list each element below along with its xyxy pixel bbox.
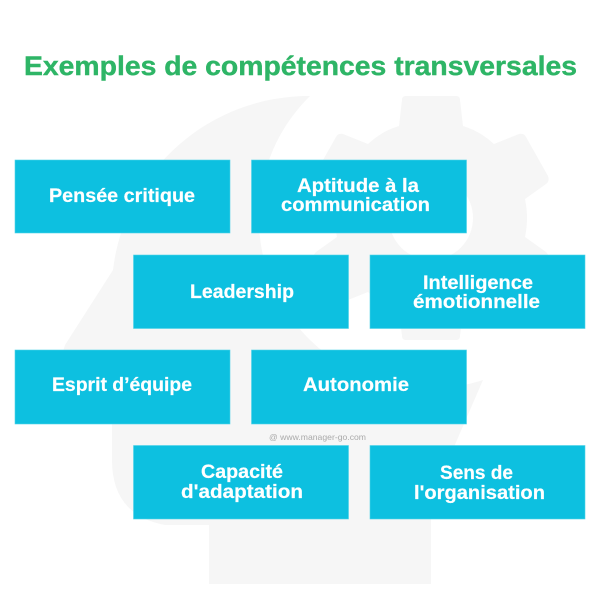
watermark: @ www.manager-go.com xyxy=(269,432,366,442)
card: Sens de l'organisation xyxy=(370,446,585,519)
card: Leadership: Leadership xyxy=(190,281,294,303)
card: Intelligence émotionnelle: Intelligence xyxy=(423,272,533,294)
card: Aptitude à la communication xyxy=(252,160,466,233)
card: Capacité d'adaptation xyxy=(134,446,348,519)
card: Intelligence émotionnelle: émotionnelle xyxy=(413,291,540,313)
head silhouette xyxy=(63,96,483,584)
card: Aptitude à la communication: Aptitude à la xyxy=(297,175,419,197)
card: Intelligence émotionnelle xyxy=(370,255,585,328)
background icon: head silhouette with gear xyxy=(63,96,549,584)
gear xyxy=(313,96,549,340)
card: Esprit d'équipe: Esprit d’équipe xyxy=(52,374,192,396)
card: Capacité d'adaptation: d'adaptation xyxy=(181,481,303,503)
card: Pensée critique: Pensée critique xyxy=(49,185,195,207)
card: Aptitude à la communication: communication xyxy=(281,194,430,216)
card: Autonomie xyxy=(252,350,466,424)
title: Exemples de compétences transversales xyxy=(24,51,577,81)
card: Esprit d'équipe xyxy=(15,350,230,424)
card: Leadership xyxy=(134,255,348,328)
card: Sens de l'organisation: Sens de xyxy=(440,462,513,484)
card: Autonomie: Autonomie xyxy=(303,374,409,396)
card: Capacité d'adaptation: Capacité xyxy=(201,461,283,483)
card: Pensée critique xyxy=(15,160,230,233)
card: Sens de l'organisation: l'organisation xyxy=(414,482,545,504)
